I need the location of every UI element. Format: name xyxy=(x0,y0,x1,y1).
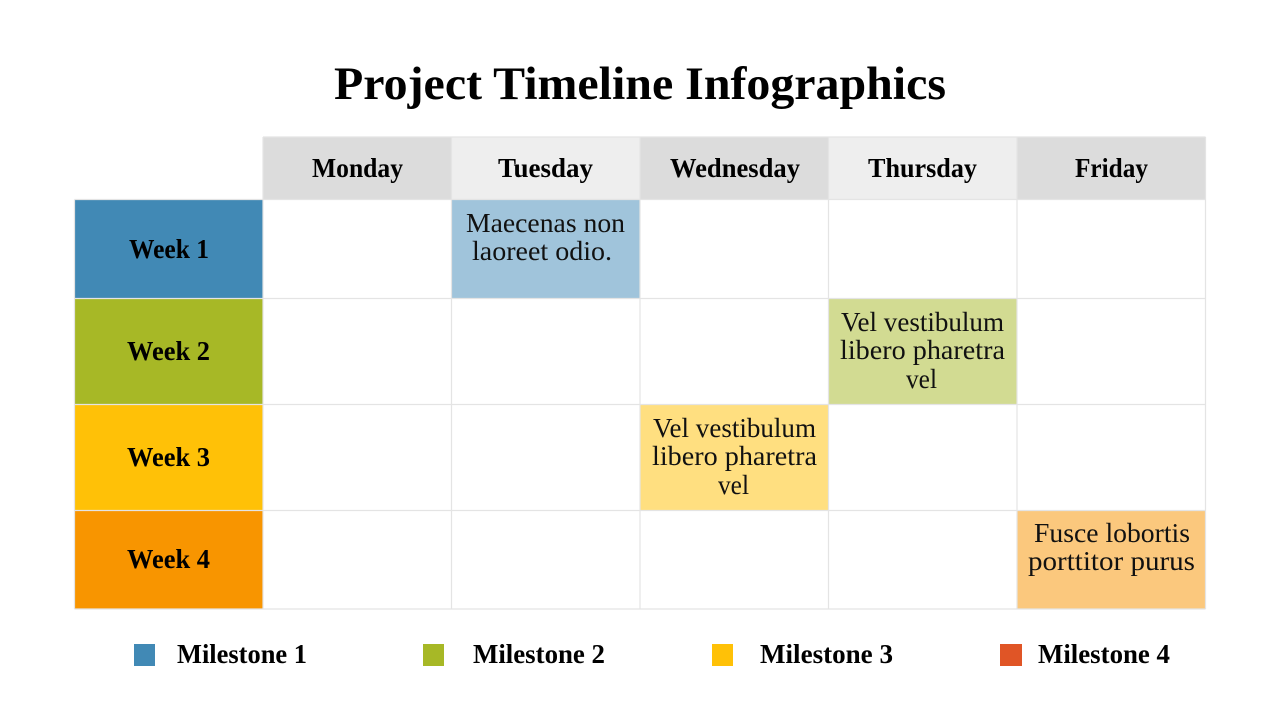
legend item: Milestone 4: Milestone 4 xyxy=(1038,639,1170,669)
header cell: Monday: Monday xyxy=(312,153,403,183)
legend item: Milestone 1: Milestone 1 xyxy=(177,639,307,669)
panel: timeline table xyxy=(74,137,1206,609)
legend item: Milestone 2: Milestone 2 xyxy=(473,639,605,669)
row label: Week 3 xyxy=(74,404,263,510)
milestone cell: Week 1 Tuesday: Maecenas non xyxy=(466,208,626,238)
legend xyxy=(134,639,1170,669)
row label: Week 3: Week 3 xyxy=(127,442,210,472)
row label: Week 2 xyxy=(74,298,263,404)
header cell: Thursday xyxy=(828,137,1017,200)
header cell: Wednesday: Wednesday xyxy=(670,153,800,183)
row label: Week 2: Week 2 xyxy=(127,336,210,366)
milestone cell: Week 4 Friday: Fusce lobortis xyxy=(1034,518,1190,548)
milestone cell: Week 3 Wednesday xyxy=(640,404,828,510)
row label: Week 1 xyxy=(74,200,263,298)
week labels xyxy=(74,200,263,609)
milestone cell: Week 2 Thursday: vel xyxy=(906,364,937,394)
milestone cell: Week 1 Tuesday xyxy=(452,200,640,298)
milestone cell: Week 3 Wednesday: Vel vestibulum xyxy=(653,413,816,443)
milestone cell: Week 4 Friday xyxy=(1017,510,1206,609)
header cell: Thursday: Thursday xyxy=(868,153,977,183)
header cell: Friday xyxy=(1017,137,1206,200)
milestone cell: Week 2 Thursday: Vel vestibulum xyxy=(841,307,1004,337)
row label: Week 4 xyxy=(74,510,263,609)
header cell: Friday: Friday xyxy=(1075,153,1148,183)
row label: Week 4: Week 4 xyxy=(127,544,210,574)
milestone cell: Week 3 Wednesday: vel xyxy=(718,470,749,500)
milestone cell: Week 1 Tuesday: laoreet odio. xyxy=(472,236,612,266)
legend item: Milestone 3: Milestone 3 xyxy=(760,639,893,669)
row label: Week 1: Week 1 xyxy=(129,234,209,264)
milestone cell: Week 2 Thursday: libero pharetra xyxy=(840,335,1005,365)
header cell: Tuesday xyxy=(452,137,640,200)
header cell: Wednesday xyxy=(640,137,828,200)
milestone cell: Week 2 Thursday xyxy=(828,298,1017,404)
header row: weekdays xyxy=(263,137,1206,200)
header cell: Monday xyxy=(263,137,452,200)
milestone cell: Week 4 Friday: porttitor purus xyxy=(1028,546,1195,576)
milestone cell: Week 3 Wednesday: libero pharetra xyxy=(652,441,817,471)
header cell: Tuesday: Tuesday xyxy=(498,153,593,183)
title: Project Timeline Infographics xyxy=(334,58,946,110)
